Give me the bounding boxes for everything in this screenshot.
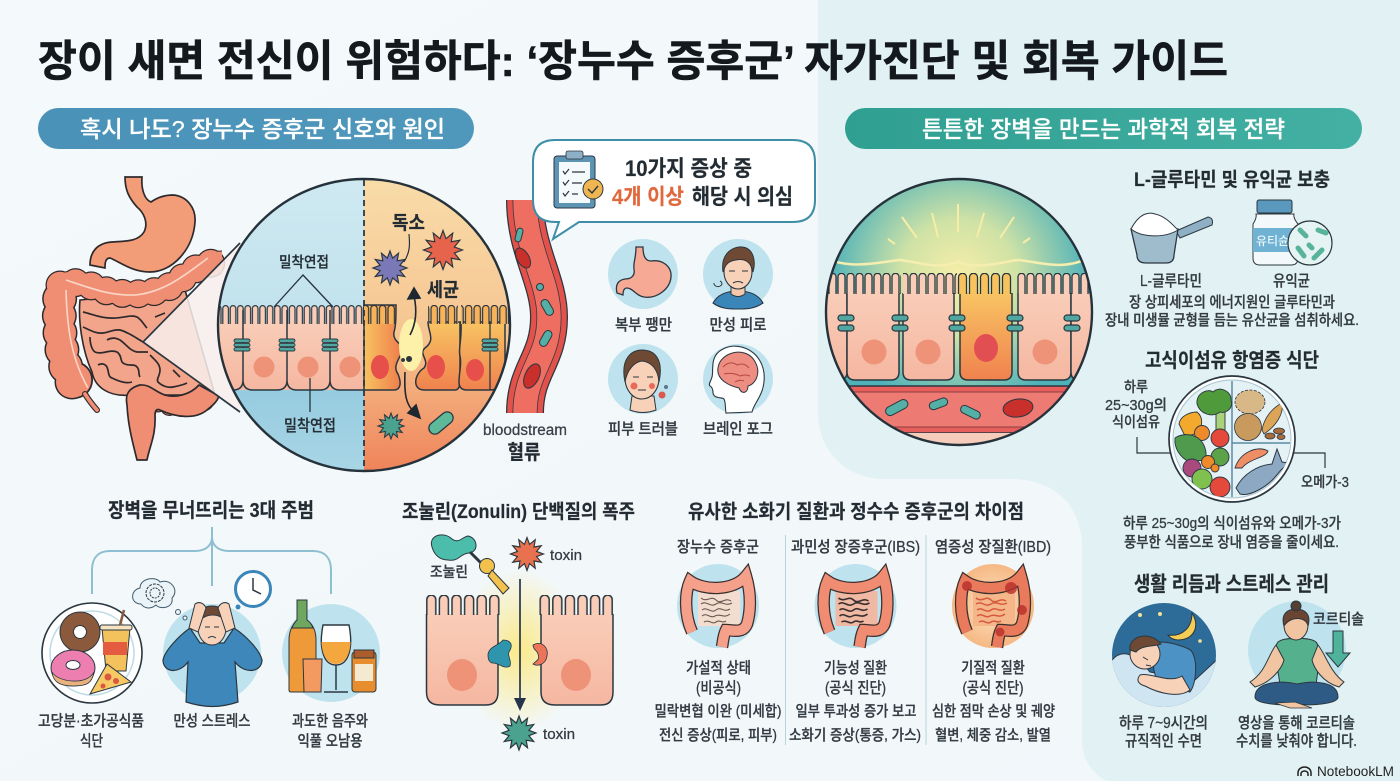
column: leaky gut: 가설적 상태: [686, 659, 751, 677]
culprit: alcohol and medication: [282, 600, 380, 702]
column: IBD: [932, 538, 1055, 744]
column: leaky gut: 전신 증상(피로, 피부): [659, 727, 777, 744]
label: sleep: 하루 7~9시간의: [1119, 714, 1208, 732]
label: omega-3: [1288, 453, 1349, 491]
text: glutamine note: 장내 미생뮬 균형믈 듬는 유산균을 섬취하세요.: [1105, 312, 1359, 329]
label: L-glutamine: L-글루타민: [1140, 272, 1202, 290]
heading: lifestyle: 생활 리듬과 스트레스 관리: [1134, 573, 1329, 596]
symptom: chronic fatigue: [703, 239, 773, 334]
stomach: [90, 177, 195, 272]
label: omega-3: 오메가-3: [1301, 474, 1349, 491]
toxin bottom: toxin: [543, 726, 575, 743]
food: salmon: [1235, 449, 1268, 468]
icon: clipboard: [554, 151, 603, 208]
text: fiber note: 하루 25~30g의 식이섬유와 오메가-3가: [1123, 515, 1341, 532]
column: leaky gut: 밀락변협 이완 (미세합): [654, 703, 782, 720]
culprit: processed food: [42, 603, 142, 703]
column: IBS: [789, 538, 921, 744]
column: IBS: (공식 진단): [825, 679, 886, 697]
dashed divider: [363, 180, 365, 471]
receptor blue: [488, 640, 511, 667]
bracket connector: [92, 527, 331, 594]
heading: comparison: 유사한 소화기 질환과 정수수 증후군의 차이점: [688, 501, 1024, 523]
large intestine: [55, 258, 222, 460]
figure: stressed person: [163, 603, 262, 706]
symptom: bloating: [608, 239, 678, 334]
icon: probiotic bottle: 유티슌: [1256, 234, 1289, 248]
heading pill: signs and causes: [38, 108, 474, 149]
column: leaky gut: [654, 538, 782, 744]
text: glutamine note: 장 상피세포의 에너지원인 글루타민과: [1129, 294, 1335, 311]
symptom: skin trouble: 피부 트러블: [608, 420, 678, 438]
label: bloodstream: bloodstream: [483, 422, 567, 439]
symptom: bloating: 복부 팽만: [615, 316, 672, 334]
heading: zonulin: 조눌린(Zonulin) 단백질의 폭주: [402, 501, 635, 523]
symptom: chronic fatigue: 만성 피로: [710, 316, 766, 334]
label: zonulin: 조눌린: [430, 564, 468, 581]
column: IBS: 과민성 장증후군(IBS): [791, 538, 920, 556]
left enterocyte: [425, 595, 501, 705]
culprit: chronic stress: [133, 572, 270, 706]
membrane line: [836, 258, 1081, 266]
diet plate: [1169, 376, 1295, 502]
column: IBS: 소화기 증상(통증, 가스): [789, 727, 921, 744]
icon: tangled thought: [133, 579, 187, 620]
icon: donut chocolate: [60, 612, 100, 652]
sigmoid scallops: [158, 396, 213, 408]
diagram: zonulin mechanism: [425, 535, 614, 750]
label: fiber amount: [1105, 379, 1172, 453]
text: fiber note: [1123, 515, 1341, 551]
label: bacteria: 세균: [427, 279, 459, 301]
arrows through gap: [405, 288, 420, 418]
column: IBD: 염증성 장질환(IBD): [935, 538, 1051, 556]
arrow: cortisol down: [1326, 631, 1350, 667]
icon: donut pink: [51, 650, 95, 686]
text: fiber note: 풍부한 식품으로 장내 염증을 줄이세요.: [1124, 534, 1339, 551]
toxin bottom: [502, 716, 575, 750]
damaged cells: [364, 305, 510, 390]
symptom: brain fog: [703, 344, 773, 438]
label: blood flow: 혈류: [508, 441, 540, 464]
label: sleep: 규직적인 수면: [1125, 732, 1202, 750]
logo: NotebookLM: NotebookLM: [1317, 764, 1394, 779]
title: 장이 새면 전신이 위험하다: ‘장누수 증후군’ 자가진단 및 회복 가이드: [38, 38, 1228, 86]
label: processed food: 고당분·초가공식품: [38, 712, 144, 730]
symptom: brain fog: 브레인 포그: [703, 420, 773, 438]
highlighted cell: [960, 293, 1012, 380]
label: tight junction bottom: 밀착연접: [284, 417, 336, 435]
callout: symptom rule: [533, 140, 815, 239]
icon: pizza slice: [90, 664, 131, 694]
icon: pill bottle: [352, 650, 376, 692]
icon: soda cup: [100, 610, 132, 671]
label: processed food: [38, 712, 144, 750]
toxin red: [424, 230, 462, 270]
zonulin protein: [431, 535, 476, 560]
label: alcohol and medication: 익풀 오남용: [298, 732, 362, 750]
heading pill: signs and causes: 혹시 나도? 장누수 증후군 신호와 원인: [80, 116, 445, 142]
toxin top: toxin: [550, 547, 582, 564]
column: IBS: 일부 투과성 증가 보고: [796, 703, 917, 720]
healthy half background: [218, 179, 364, 472]
label: cortisol: 코르티솔: [1313, 611, 1364, 628]
magnifier cone: [143, 243, 240, 412]
appendix: [85, 394, 97, 410]
heading: fiber diet: 고식이섬유 항염증 식단: [1145, 349, 1319, 372]
blood vessel: [850, 385, 1068, 433]
damaged half background: [364, 179, 510, 472]
icon: meditating person: [1248, 601, 1346, 708]
right enterocyte: [538, 595, 614, 705]
label: alcohol and medication: 과도한 음주와: [292, 712, 368, 730]
label: toxin: 독소: [392, 213, 425, 234]
label: fiber amount: 식이섬유: [1112, 414, 1160, 431]
rectum and sigmoid: [126, 385, 219, 460]
sun rays: [888, 204, 1030, 244]
label: processed food: 식단: [80, 732, 103, 750]
icon: glutamine scoop: [1131, 213, 1212, 263]
icon: tumbler: [303, 659, 322, 692]
toxin purple: [373, 251, 407, 285]
icon: colon IBS: [814, 564, 896, 648]
callout: symptom rule: 10가지 증상 중: [625, 156, 752, 181]
text: glutamine note: [1105, 294, 1359, 329]
icon: colon normal: [677, 564, 759, 648]
key: [470, 552, 509, 594]
flow arrow: [514, 579, 526, 711]
column dividers: [786, 535, 926, 745]
column: leaky gut: (비공식): [696, 679, 741, 697]
tight junction glow: [457, 568, 581, 732]
food: fish: [1236, 449, 1289, 495]
icon: clock: [236, 572, 270, 610]
symptom: skin trouble: [608, 344, 678, 438]
label: tight junction top: [274, 254, 333, 307]
toxin top: [510, 538, 582, 570]
heading: glutamine and probiotics: L-글루타민 및 유익균 보충: [1134, 169, 1330, 191]
circle outline: [218, 179, 510, 471]
panel: magnified gut barrier: [218, 179, 510, 472]
heading pill: recovery strategy: 튼튼한 장벽을 만드는 과학적 회복 전략: [922, 116, 1285, 142]
label: toxin: [392, 213, 425, 262]
label: meditation: 영상을 통해 코르티솔: [1238, 714, 1355, 732]
label: probiotics: 유익균: [1273, 272, 1310, 290]
heading: three culprits: 장벽을 무너뜨리는 3대 주범: [108, 499, 314, 522]
callout: symptom rule: 해당 시 의심: [692, 185, 793, 209]
healthy cells: [218, 305, 364, 390]
label: fiber amount: 하루: [1124, 379, 1148, 396]
sky: [826, 178, 1092, 388]
label: alcohol and medication: [292, 712, 368, 750]
label: sleep: [1119, 714, 1208, 750]
label: chronic stress: 만성 스트레스: [174, 712, 250, 730]
icon: probiotic bottle: [1253, 200, 1332, 265]
column: IBS: 기능성 질환: [824, 659, 887, 677]
receptor orange: [533, 643, 547, 665]
column: leaky gut: 장누수 증후군: [677, 538, 759, 556]
label: fiber amount: 25~30g의: [1105, 397, 1167, 414]
panel: recovery background: [818, 0, 1400, 781]
column: IBD: 심한 점막 손상 및 궤양: [932, 703, 1055, 720]
label: tight junction bottom: [284, 378, 336, 435]
illustration: bloodstream vessel: [512, 200, 555, 413]
pink cells: [820, 293, 1098, 380]
food: vegetables: [1175, 389, 1232, 497]
panel: healed intestinal wall: [820, 178, 1098, 447]
icon: colon IBD: [952, 564, 1034, 648]
circle outline: [826, 179, 1092, 445]
icon: bottle: [289, 600, 316, 692]
callout: symptom rule: 4개 이상: [612, 185, 684, 209]
illustration: digestive system: [55, 177, 222, 460]
icon: wine glass: [321, 625, 351, 692]
small intestine: [80, 290, 215, 395]
column: IBD: (공식 진단): [962, 679, 1024, 697]
bacterium green round: [378, 413, 404, 439]
icon: sleeping person: [1112, 603, 1216, 707]
label: tight junction top: 밀착연접: [279, 254, 329, 271]
label: meditation: [1236, 714, 1357, 750]
bacterium green rod: [426, 409, 456, 437]
food: grains and nuts: [1234, 390, 1285, 440]
heading pill: recovery strategy: [845, 108, 1362, 149]
label: meditation: 수치를 낮춰야 합니다.: [1236, 732, 1357, 750]
column: IBD: 기질적 질환: [961, 659, 1025, 677]
column: IBD: 혈변, 체중 감소, 발열: [935, 727, 1051, 744]
